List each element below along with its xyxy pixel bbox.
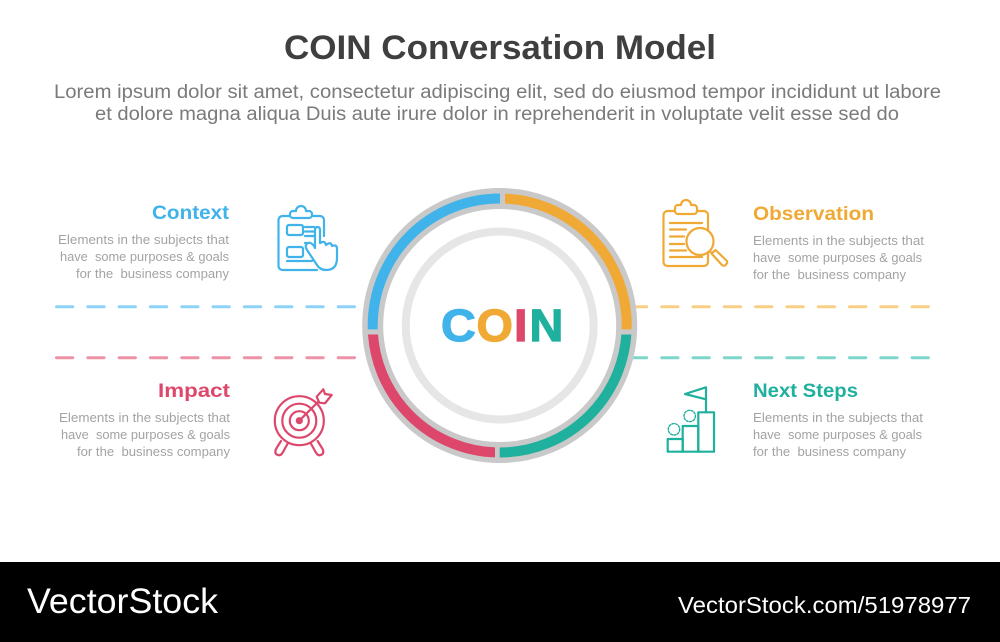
outer grey ring bbox=[373, 198, 627, 452]
text block: observation: Elements in the subjects that bbox=[753, 233, 924, 248]
text block: impact bbox=[59, 410, 231, 459]
panel: impact bbox=[59, 381, 332, 459]
icon: target with arrow bbox=[275, 389, 332, 455]
text block: impact: Elements in the subjects that bbox=[59, 410, 230, 425]
dashed connector: observation bbox=[630, 305, 929, 308]
panel: observation bbox=[664, 200, 924, 282]
dashed connector: context bbox=[56, 305, 355, 308]
text block: context: Elements in the subjects that bbox=[58, 232, 229, 247]
text block: impact: for the business company bbox=[77, 444, 231, 459]
segment: observation bbox=[505, 194, 632, 330]
panel: next steps bbox=[668, 381, 923, 459]
footer logo text: VectorStock bbox=[27, 582, 219, 621]
subtitle text: Lorem ipsum dolor sit amet, consectetur adipiscing elit, sed do eiusmod tempor incididunt ut labore bbox=[54, 82, 941, 103]
text block: context bbox=[58, 232, 230, 281]
text block: next steps: Elements in the subjects that bbox=[753, 410, 923, 425]
footer bar bbox=[0, 562, 1000, 642]
text block: context: for the business company bbox=[76, 266, 230, 281]
text block: impact: have some purposes & goals bbox=[61, 427, 230, 442]
text block: next steps: have some purposes & goals bbox=[753, 427, 922, 442]
center word COIN: N bbox=[530, 300, 563, 351]
dashed connector: impact bbox=[56, 356, 355, 359]
text block: observation: have some purposes & goals bbox=[753, 250, 922, 265]
text block: context: have some purposes & goals bbox=[60, 249, 229, 264]
inner grey ring bbox=[406, 232, 594, 420]
panel: context bbox=[58, 203, 337, 281]
title: COIN Conversation Model bbox=[284, 29, 716, 67]
heading: observation: Observation bbox=[753, 204, 874, 225]
segment: next steps bbox=[500, 334, 632, 458]
center word COIN: O bbox=[476, 300, 513, 351]
heading: next steps: Next Steps bbox=[753, 381, 858, 402]
center word COIN: C bbox=[441, 301, 476, 351]
text block: observation bbox=[753, 233, 924, 282]
text block: observation: for the business company bbox=[753, 267, 907, 282]
footer image id: VectorStock.com/51978977 bbox=[678, 592, 971, 618]
segment: impact bbox=[368, 334, 495, 458]
center word COIN: I bbox=[514, 301, 528, 351]
segment: context bbox=[368, 194, 500, 330]
text block: next steps bbox=[753, 410, 923, 459]
subtitle text: et dolore magna aliqua Duis aute irure dolor in reprehenderit in voluptate velit esse sed do bbox=[95, 104, 899, 125]
center word COIN bbox=[441, 300, 563, 351]
icon: clipboard with magnifier bbox=[664, 200, 727, 266]
icon: stair bars with flag bbox=[668, 387, 714, 452]
dashed connector: next steps bbox=[630, 356, 929, 359]
subtitle text bbox=[54, 82, 941, 125]
icon: clipboard with pointing hand bbox=[278, 206, 337, 270]
central ring diagram bbox=[373, 198, 627, 452]
text block: next steps: for the business company bbox=[753, 444, 907, 459]
heading: context: Context bbox=[152, 203, 230, 224]
heading: impact: Impact bbox=[158, 381, 231, 402]
